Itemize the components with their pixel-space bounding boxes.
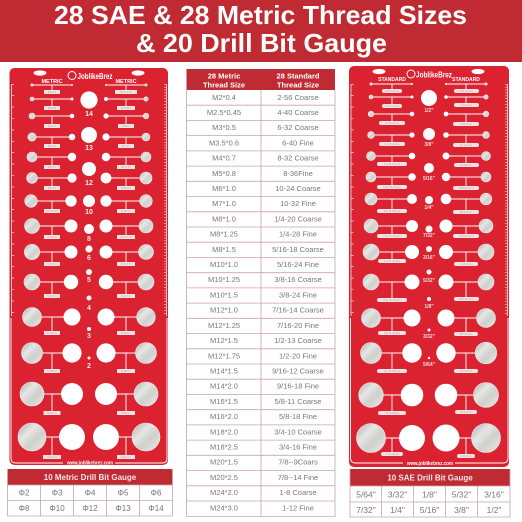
table: thread sizes: 8-32 Coarse xyxy=(277,154,319,163)
table: thread sizes: M12*1.75 xyxy=(208,351,240,360)
table: thread sizes: M8*1.0 xyxy=(212,214,236,223)
metric row 13: M20*2.5 xyxy=(121,411,131,415)
table: 10 SAE drill bit gauge: 1/8" xyxy=(422,490,437,500)
panel: standard gauge plate: STANDARD xyxy=(378,77,406,83)
table: thread sizes: M4*0.7 xyxy=(212,154,236,163)
table: thread sizes: M3*0.5 xyxy=(212,123,236,132)
table: thread sizes: 1/2-20 Fine xyxy=(279,351,317,360)
metric row 13: M20*1.5 xyxy=(47,411,57,415)
standard row 3: 8-36 Fine xyxy=(461,122,472,126)
standard row 14 xyxy=(356,424,500,458)
table: thread sizes: M24*2.0 xyxy=(210,488,238,497)
table: thread sizes xyxy=(186,69,335,516)
table: thread sizes: M18*2.5 xyxy=(210,442,238,452)
panel: standard gauge plate: STANDARD xyxy=(452,77,480,83)
table: thread sizes: 1-8 Coarse xyxy=(279,488,317,497)
metric row 6 xyxy=(27,172,152,190)
metric row 10: M14*2.0 xyxy=(121,294,131,298)
metric row 5: M8*1.0 xyxy=(48,165,57,169)
table: thread sizes: 6-32 Coarse xyxy=(277,123,319,132)
standard row 1 xyxy=(370,83,487,93)
table: thread sizes: M2*0.4 xyxy=(212,93,236,102)
standard row 8: 7/16-20 Fine xyxy=(459,234,474,238)
metric row 14: M24*3.0 xyxy=(121,455,131,459)
table: 10 metric drill bit gauge: Φ10 xyxy=(49,504,65,513)
standard row 1: 4-40 Coarse xyxy=(459,89,474,93)
standard drill holes: 3/16" xyxy=(423,255,436,261)
table: thread sizes: M18*2.0 xyxy=(210,427,238,436)
standard row 9: 1/2-13 Coarse xyxy=(384,259,401,263)
title banner xyxy=(0,0,522,62)
panel: standard gauge plate xyxy=(349,66,509,467)
logo: JoblikeBrez xyxy=(416,70,452,80)
table: 10 SAE drill bit gauge: 7/32" xyxy=(356,505,376,515)
panel: metric gauge plate: METRIC xyxy=(41,79,63,85)
table: 10 metric drill bit gauge: 10 Metric Drill Bit Gauge xyxy=(44,473,137,482)
table: thread sizes: 9/16-12 Coarse xyxy=(272,366,324,376)
standard row 6: 5/16-24 Fine xyxy=(459,186,474,190)
metric row 12 xyxy=(22,342,156,373)
metric drill holes: 4 xyxy=(87,305,91,312)
standard drill holes: 7/32" xyxy=(423,233,436,239)
metric row 14 xyxy=(18,423,160,459)
title banner: & 20 Drill Bit Gauge xyxy=(136,28,387,58)
metric row 7 xyxy=(25,195,152,213)
standard drill holes xyxy=(421,90,437,368)
table: 10 metric drill bit gauge xyxy=(8,469,172,516)
standard row 7: 3/8-24 Fine xyxy=(459,210,473,214)
metric row 6: M8*1.5 xyxy=(48,186,57,190)
metric row 10: M14*1.5 xyxy=(47,294,57,298)
standard drill holes: 1/4" xyxy=(424,205,434,211)
table: thread sizes: M7*1.0 xyxy=(212,199,236,208)
table: thread sizes: M8*1.5 xyxy=(212,245,236,254)
metric row 5: M8*1.25 xyxy=(121,165,131,169)
table: thread sizes: 7/16-20 Fine xyxy=(277,321,319,330)
metric row 12: M18*2.5 xyxy=(121,369,131,373)
metric drill holes: 2 xyxy=(87,363,91,370)
table: thread sizes: 10-24 Coarse xyxy=(275,184,321,193)
standard row 8 xyxy=(364,219,493,238)
metric row 11 xyxy=(22,308,155,335)
logo xyxy=(407,70,452,80)
metric row 14: M24*2.0 xyxy=(47,455,57,459)
standard drill holes: 3/8" xyxy=(424,142,434,148)
table: thread sizes: 4-40 Coarse xyxy=(277,108,319,117)
table: thread sizes: 1/4-20 Coarse xyxy=(274,214,322,223)
metric row 9 xyxy=(24,244,153,266)
table: thread sizes: M14*1.5 xyxy=(210,366,238,376)
website: www.joblikebrez.com xyxy=(406,461,453,467)
table: 10 SAE drill bit gauge: 3/32" xyxy=(388,490,407,500)
table: thread sizes: M5*0.8 xyxy=(212,169,236,178)
standard row 10: 9/16-18 Fine xyxy=(459,297,474,301)
standard row 9: 1/2-20 Fine xyxy=(459,262,473,266)
table: thread sizes: Thread Size xyxy=(277,80,319,90)
standard row 13: 7/8-14 Fine xyxy=(459,410,473,414)
metric row 11: M16*1.5 xyxy=(47,331,57,335)
standard drill holes: 5/64" xyxy=(423,362,436,368)
standard drill holes: 5/16" xyxy=(423,176,436,182)
standard row 3: 8-32 Coarse xyxy=(385,121,400,125)
standard row 8: 7/16-14 Coarse xyxy=(383,234,401,238)
table: 10 metric drill bit gauge: Φ12 xyxy=(82,504,98,513)
table: thread sizes: Thread Size xyxy=(203,80,245,90)
table: thread sizes: M20*2.5 xyxy=(210,473,238,482)
table: 10 metric drill bit gauge: Φ2 xyxy=(19,488,30,498)
table: 10 SAE drill bit gauge: 10 SAE Drill Bit Gauge xyxy=(387,474,473,482)
metric row 3: M5*0.8 xyxy=(122,124,131,128)
standard drill holes: 1/2" xyxy=(424,108,434,114)
table: 10 metric drill bit gauge: Φ4 xyxy=(85,488,96,498)
standard drill holes: 5/32" xyxy=(423,278,436,284)
metric row 12: M18*2.0 xyxy=(47,369,57,373)
table: thread sizes: M2.5*0.45 xyxy=(207,108,241,117)
title banner: 28 SAE & 28 Metric Thread Sizes xyxy=(54,0,467,30)
table: thread sizes: 7/8--9Coars xyxy=(278,458,318,467)
metric drill holes: 13 xyxy=(85,145,93,152)
table: thread sizes: 9/16-18 Fine xyxy=(277,382,319,391)
table: thread sizes: M12*1.5 xyxy=(210,336,238,345)
table: thread sizes: 7/8--14 Fine xyxy=(278,473,318,482)
standard row 7: 3/8-16 Coarse xyxy=(384,209,401,213)
rulers xyxy=(12,84,166,316)
table: thread sizes: M16*1.5 xyxy=(210,397,238,406)
table: 10 SAE drill bit gauge: 5/16" xyxy=(420,505,439,515)
standard row 12: 3/4-10 Coarse xyxy=(384,369,401,373)
metric drill holes: 6 xyxy=(87,255,91,262)
table: thread sizes: M24*3.0 xyxy=(210,503,238,512)
standard row 6: 5/16-18 Coarse xyxy=(383,185,401,189)
table: thread sizes: 7/16-14 Coarse xyxy=(272,306,324,315)
metric row 13 xyxy=(20,382,158,415)
metric row 11: M16*2.0 xyxy=(121,331,131,335)
table: thread sizes: M20*1.5 xyxy=(210,458,238,467)
table: 10 SAE drill bit gauge: 1/4" xyxy=(390,505,405,515)
standard row 14: 1-12 Fine xyxy=(461,454,472,458)
metric row 2: M3.5*0.6 xyxy=(121,106,132,110)
table: 10 metric drill bit gauge: Φ13 xyxy=(115,504,131,513)
standard row 11 xyxy=(362,308,496,336)
standard row 4 xyxy=(368,132,489,147)
table: thread sizes: M14*2.0 xyxy=(210,382,238,391)
metric row 8: M12*1.0 xyxy=(47,235,57,239)
table: thread sizes: 8-36Fine xyxy=(283,169,313,178)
metric row 7: M10*1.5 xyxy=(121,209,131,213)
table: thread sizes: 5/16-18 Coarse xyxy=(272,245,324,254)
table: thread sizes: 1/4-28 Fine xyxy=(279,230,317,239)
table: 10 SAE drill bit gauge: 5/64" xyxy=(356,490,376,500)
rulers xyxy=(351,84,508,316)
metric row 3 xyxy=(29,113,149,128)
standard row 13: 7/8-9 Coarse xyxy=(384,411,400,415)
metric row 2 xyxy=(30,97,148,110)
standard drill holes: 3/32" xyxy=(423,334,436,340)
table: thread sizes: M10*1.5 xyxy=(210,290,238,299)
panel: metric gauge plate xyxy=(10,68,168,466)
table: 10 metric drill bit gauge: Φ5 xyxy=(118,488,129,498)
table: thread sizes: M8*1.25 xyxy=(210,230,238,239)
standard row 4: 10-32 Fine xyxy=(460,143,473,147)
table: thread sizes: 1/2-13 Coarse xyxy=(274,336,322,345)
metric drill holes xyxy=(80,91,98,370)
standard row 9 xyxy=(363,244,494,266)
standard row 4: 10-24 Coarse xyxy=(384,142,400,146)
table: thread sizes: M6*1.0 xyxy=(212,184,236,193)
table: thread sizes: 5/8-18 Fine xyxy=(279,412,317,421)
panel: metric gauge plate: METRIC xyxy=(115,79,137,85)
table: thread sizes: M10*1.0 xyxy=(210,260,238,269)
metric drill holes: 14 xyxy=(85,111,93,118)
standard row 12: 3/4-16 Fine xyxy=(459,369,473,373)
metric row 8 xyxy=(24,218,153,239)
standard row 14: 1-8 Coarse xyxy=(386,452,399,456)
logo: JoblikeBrez xyxy=(78,71,112,81)
metric row 8: M12*1.25 xyxy=(120,235,132,239)
metric row 7: M10*1.25 xyxy=(46,209,58,213)
standard row 12 xyxy=(360,342,497,373)
metric row 10 xyxy=(24,274,154,298)
table: thread sizes: 2-56 Coarse xyxy=(277,93,319,102)
table: thread sizes: 3/8-16 Coarse xyxy=(274,275,322,284)
website: www.joblikebrez.com xyxy=(66,460,113,466)
table: thread sizes: 1-12 Fine xyxy=(282,503,314,512)
table: 10 SAE drill bit gauge: 5/32" xyxy=(452,490,471,500)
metric row 1: M2.5*0.45 xyxy=(120,90,132,94)
standard row 5: 1/4-20 Coarse xyxy=(384,162,401,166)
metric drill holes: 12 xyxy=(85,180,93,187)
standard row 6 xyxy=(366,172,491,190)
table: thread sizes: 10-32 Fine xyxy=(280,199,316,208)
table: 10 metric drill bit gauge: Φ14 xyxy=(148,504,164,513)
standard row 5: 1/4-28 Fine xyxy=(459,163,473,167)
table: thread sizes: 28 Metric xyxy=(208,72,240,80)
table: 10 SAE drill bit gauge xyxy=(350,469,510,517)
standard row 1: 2-56 Coarse xyxy=(385,89,400,93)
table: 10 SAE drill bit gauge: 3/16" xyxy=(484,490,504,500)
table: thread sizes: M3.5*0.6 xyxy=(209,138,239,147)
table: thread sizes: 3/8-24 Fine xyxy=(279,290,317,299)
standard row 2: 6-32 Coarse xyxy=(385,104,400,108)
table: thread sizes: M10*1.25 xyxy=(208,275,240,284)
standard drill holes: 1/8" xyxy=(424,304,434,310)
metric drill holes: 10 xyxy=(85,209,93,216)
standard row 11: 5/8-18 Fine xyxy=(459,332,473,336)
standard row 11: 5/8-11 Coarse xyxy=(384,331,401,335)
table: 10 metric drill bit gauge: Φ8 xyxy=(19,504,30,513)
table: 10 metric drill bit gauge: Φ3 xyxy=(52,488,63,498)
table: thread sizes: 3/4-16 Fine xyxy=(279,442,317,452)
table: thread sizes: M12*1.25 xyxy=(208,321,240,330)
table: 10 SAE drill bit gauge: 3/8" xyxy=(454,505,469,515)
metric row 4: M7*1.0 xyxy=(122,144,131,148)
standard row 13 xyxy=(359,382,498,415)
metric drill holes: 8 xyxy=(87,236,91,243)
metric row 3: M4*0.7 xyxy=(48,124,57,128)
standard row 3 xyxy=(368,111,489,126)
standard row 10 xyxy=(363,274,494,302)
metric row 9: M12*1.75 xyxy=(120,262,132,266)
standard row 5 xyxy=(366,152,490,167)
metric drill holes: 5 xyxy=(87,277,91,284)
standard row 10: 9/16-12 Coarse xyxy=(383,298,401,302)
standard row 2 xyxy=(369,95,488,108)
metric row 4: M6*1.0 xyxy=(48,144,57,148)
table: thread sizes: 28 Standard xyxy=(277,72,320,80)
metric row 9: M12*1.5 xyxy=(47,262,57,266)
standard row 7 xyxy=(365,193,492,214)
metric row 5 xyxy=(27,152,151,169)
table: thread sizes: 3/4-10 Coarse xyxy=(274,427,322,436)
metric row 6: M10*1.0 xyxy=(121,186,131,190)
metric row 2: M3*0.5 xyxy=(48,106,57,110)
metric row 1: M2*0.4 xyxy=(48,90,57,94)
metric row 1 xyxy=(31,84,147,94)
table: thread sizes: 5/8-11 Coarse xyxy=(275,397,321,406)
metric drill holes: 3 xyxy=(87,333,91,340)
standard row 2: 6-40 Fine xyxy=(461,103,472,107)
logo xyxy=(68,71,112,81)
table: thread sizes: 6-40 Fine xyxy=(282,138,314,147)
table: thread sizes: M12*1.0 xyxy=(210,306,238,315)
table: thread sizes: M16*2.0 xyxy=(210,412,238,421)
table: 10 SAE drill bit gauge: 1/2" xyxy=(487,505,501,515)
table: 10 metric drill bit gauge: Φ6 xyxy=(151,488,162,498)
table: thread sizes: 5/16-24 Fine xyxy=(277,260,319,269)
metric row 4 xyxy=(28,133,150,148)
